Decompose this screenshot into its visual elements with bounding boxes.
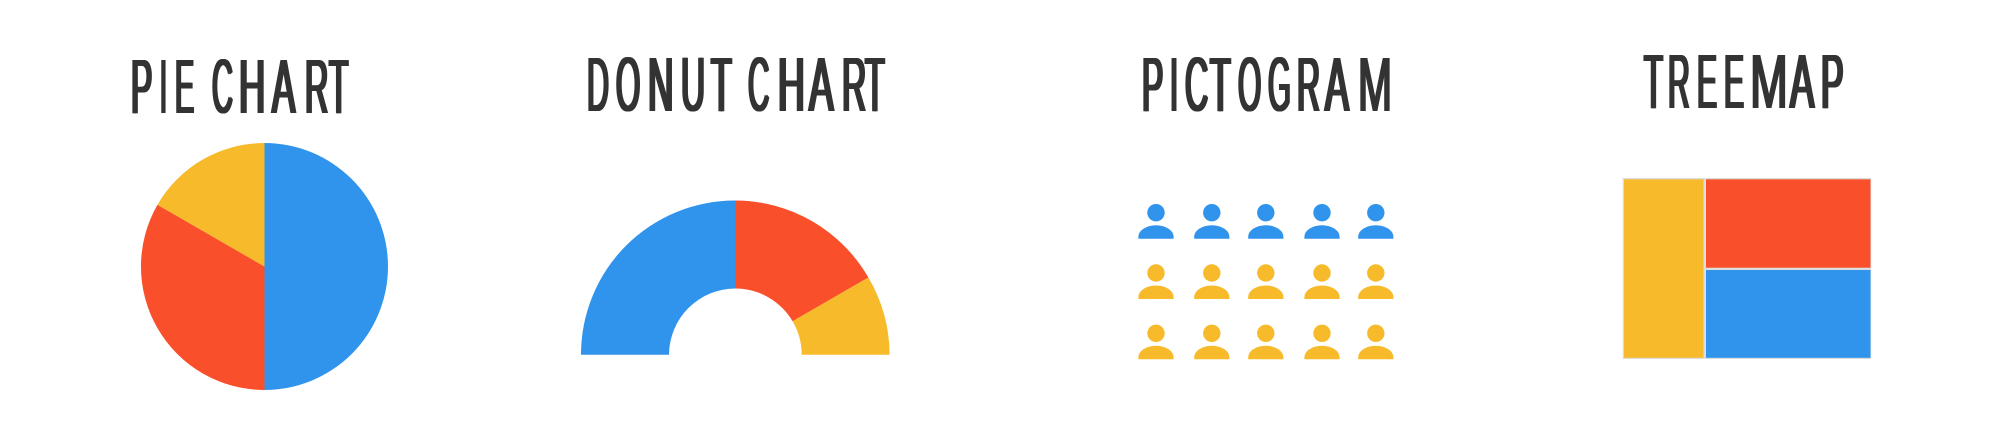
heading: donut chart: N (648, 42, 673, 128)
heading: treemap: P (1821, 39, 1844, 125)
heading: pie chart: I (160, 44, 167, 130)
heading: pie chart: A (272, 44, 295, 130)
heading: pictogram: M (1358, 42, 1392, 128)
donut chart graphic (581, 200, 890, 355)
icon: person (1358, 264, 1393, 299)
icon: person (1304, 204, 1340, 239)
heading: donut chart: O (616, 42, 640, 128)
heading: treemap: A (1790, 39, 1815, 125)
icon: person (1248, 325, 1283, 359)
heading: pie chart: R (305, 44, 328, 130)
slice: red (141, 205, 264, 390)
heading: donut chart: R (842, 42, 866, 128)
slice: blue (264, 143, 388, 390)
heading: pictogram (1142, 42, 1392, 128)
panel: donut chart (581, 42, 890, 355)
segment: yellow (793, 278, 890, 355)
panel: pie chart (131, 44, 388, 390)
treemap frame (1623, 178, 1871, 359)
heading: donut chart: U (681, 42, 705, 128)
heading: pie chart: T (329, 44, 348, 130)
heading: pictogram: T (1210, 42, 1231, 128)
heading: pie chart: C (212, 44, 233, 130)
heading: donut chart: D (587, 42, 609, 128)
icon: person (1138, 204, 1174, 239)
heading: pictogram: O (1238, 42, 1262, 128)
icon: person (1358, 204, 1393, 239)
heading: pictogram: C (1185, 42, 1208, 128)
heading: pictogram: G (1268, 42, 1291, 128)
heading: treemap (1643, 39, 1844, 125)
heading: pictogram: P (1142, 42, 1164, 128)
heading: treemap: M (1750, 39, 1787, 125)
heading: donut chart: C (748, 42, 770, 128)
heading: donut chart: T (711, 42, 732, 128)
heading: treemap: E (1697, 39, 1717, 125)
icon: person (1194, 204, 1229, 239)
cell: yellow (1624, 179, 1704, 358)
segment: red (735, 200, 868, 321)
icon: person (1194, 325, 1229, 359)
icon: person (1248, 264, 1283, 299)
heading: pictogram: I (1170, 42, 1178, 128)
heading: pictogram: R (1297, 42, 1320, 128)
pie chart graphic (140, 143, 388, 390)
heading: donut chart (587, 42, 886, 128)
heading: pie chart: P (131, 44, 152, 130)
panel: pictogram (1138, 42, 1394, 360)
heading: donut chart: H (778, 42, 804, 128)
heading: donut chart: T (865, 42, 885, 128)
heading: pie chart: E (175, 44, 194, 130)
heading: treemap: R (1668, 39, 1690, 125)
pictogram row 1: blue people (1138, 204, 1393, 239)
icon: person (1248, 204, 1283, 239)
pictogram row 3: yellow people (1138, 325, 1393, 359)
panel: treemap (1622, 39, 1872, 359)
slice: yellow (158, 143, 264, 266)
heading: donut chart: A (809, 42, 834, 128)
pictogram row 2: yellow people (1138, 264, 1393, 299)
cell: blue (1706, 270, 1870, 358)
treemap graphic (1622, 178, 1872, 359)
icon: person (1138, 325, 1174, 359)
heading: pie chart: H (239, 44, 265, 130)
icon: person (1138, 264, 1174, 299)
segment: blue (581, 200, 735, 355)
pictogram people grid (1138, 204, 1394, 360)
heading: treemap: E (1724, 39, 1744, 125)
cell: red (1706, 179, 1870, 268)
icon: person (1358, 325, 1393, 359)
heading: pictogram: A (1325, 42, 1349, 128)
icon: person (1304, 264, 1340, 299)
icon: person (1194, 264, 1229, 299)
icon: person (1304, 325, 1340, 359)
heading: pie chart (131, 44, 349, 130)
heading: treemap: T (1644, 39, 1662, 125)
